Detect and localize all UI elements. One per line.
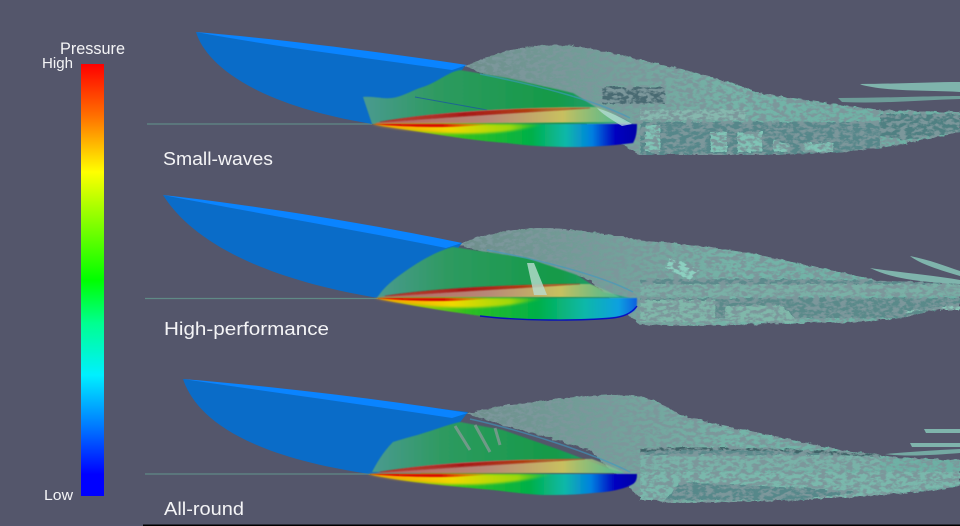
label: All-round — [164, 498, 244, 519]
wave streak, lower — [838, 96, 960, 103]
board rail — [196, 32, 467, 70]
deck wave fingers — [455, 425, 500, 452]
blue rim of deck — [480, 74, 630, 118]
wake and wave surface — [466, 395, 960, 503]
bottom edge line — [143, 524, 960, 526]
panel: all-round board — [145, 379, 960, 519]
wave streak, upper — [910, 256, 960, 276]
board body — [183, 379, 468, 474]
wave streak, upper — [860, 82, 960, 92]
blue rim of deck — [470, 419, 630, 472]
low label: Low — [44, 487, 73, 504]
centre line — [147, 123, 372, 125]
hull hot streak — [372, 124, 490, 127]
deck red streak — [380, 459, 585, 472]
pressure field, deck — [363, 70, 630, 124]
color scale legend — [42, 40, 125, 504]
legend title: Pressure — [60, 40, 125, 58]
wave highlight — [527, 263, 547, 295]
hull hot streak — [375, 298, 490, 301]
wave streak, lower — [870, 268, 960, 284]
hull yellow band — [372, 124, 545, 134]
blue streak on deck — [415, 97, 487, 110]
wave streak, top — [924, 429, 960, 433]
blue rim of deck — [487, 250, 633, 292]
wave highlight — [597, 108, 632, 126]
deck pressure lens — [376, 459, 625, 473]
wake and wave surface — [465, 45, 960, 155]
hull yellow band — [368, 474, 555, 485]
board body — [163, 195, 462, 298]
wave streak, middle — [910, 443, 960, 447]
label: Small-waves — [163, 149, 273, 169]
centre line — [145, 473, 370, 475]
pressure field, deck — [377, 247, 630, 298]
wave streak, lower — [885, 449, 960, 456]
wake and wave surface — [458, 228, 960, 326]
hull pressure — [368, 474, 637, 495]
hull yellow band — [375, 298, 545, 308]
label: High-performance — [164, 319, 329, 339]
deck pressure lens — [380, 284, 620, 297]
hull pressure — [372, 124, 637, 147]
pressure field, deck — [372, 422, 625, 473]
centre line — [145, 298, 378, 300]
color bar — [81, 64, 104, 496]
board rail — [163, 195, 462, 248]
deck pressure lens — [376, 107, 625, 124]
hull hot streak — [368, 474, 490, 477]
deck red streak — [385, 284, 580, 296]
deck red streak — [380, 108, 590, 122]
board body — [196, 32, 465, 124]
hull pressure — [375, 298, 637, 320]
board rail — [183, 379, 468, 418]
panel: small-waves board — [147, 32, 960, 169]
hull blue rim — [480, 306, 637, 320]
panel: high-performance board — [145, 195, 960, 339]
high label: High — [42, 55, 73, 72]
